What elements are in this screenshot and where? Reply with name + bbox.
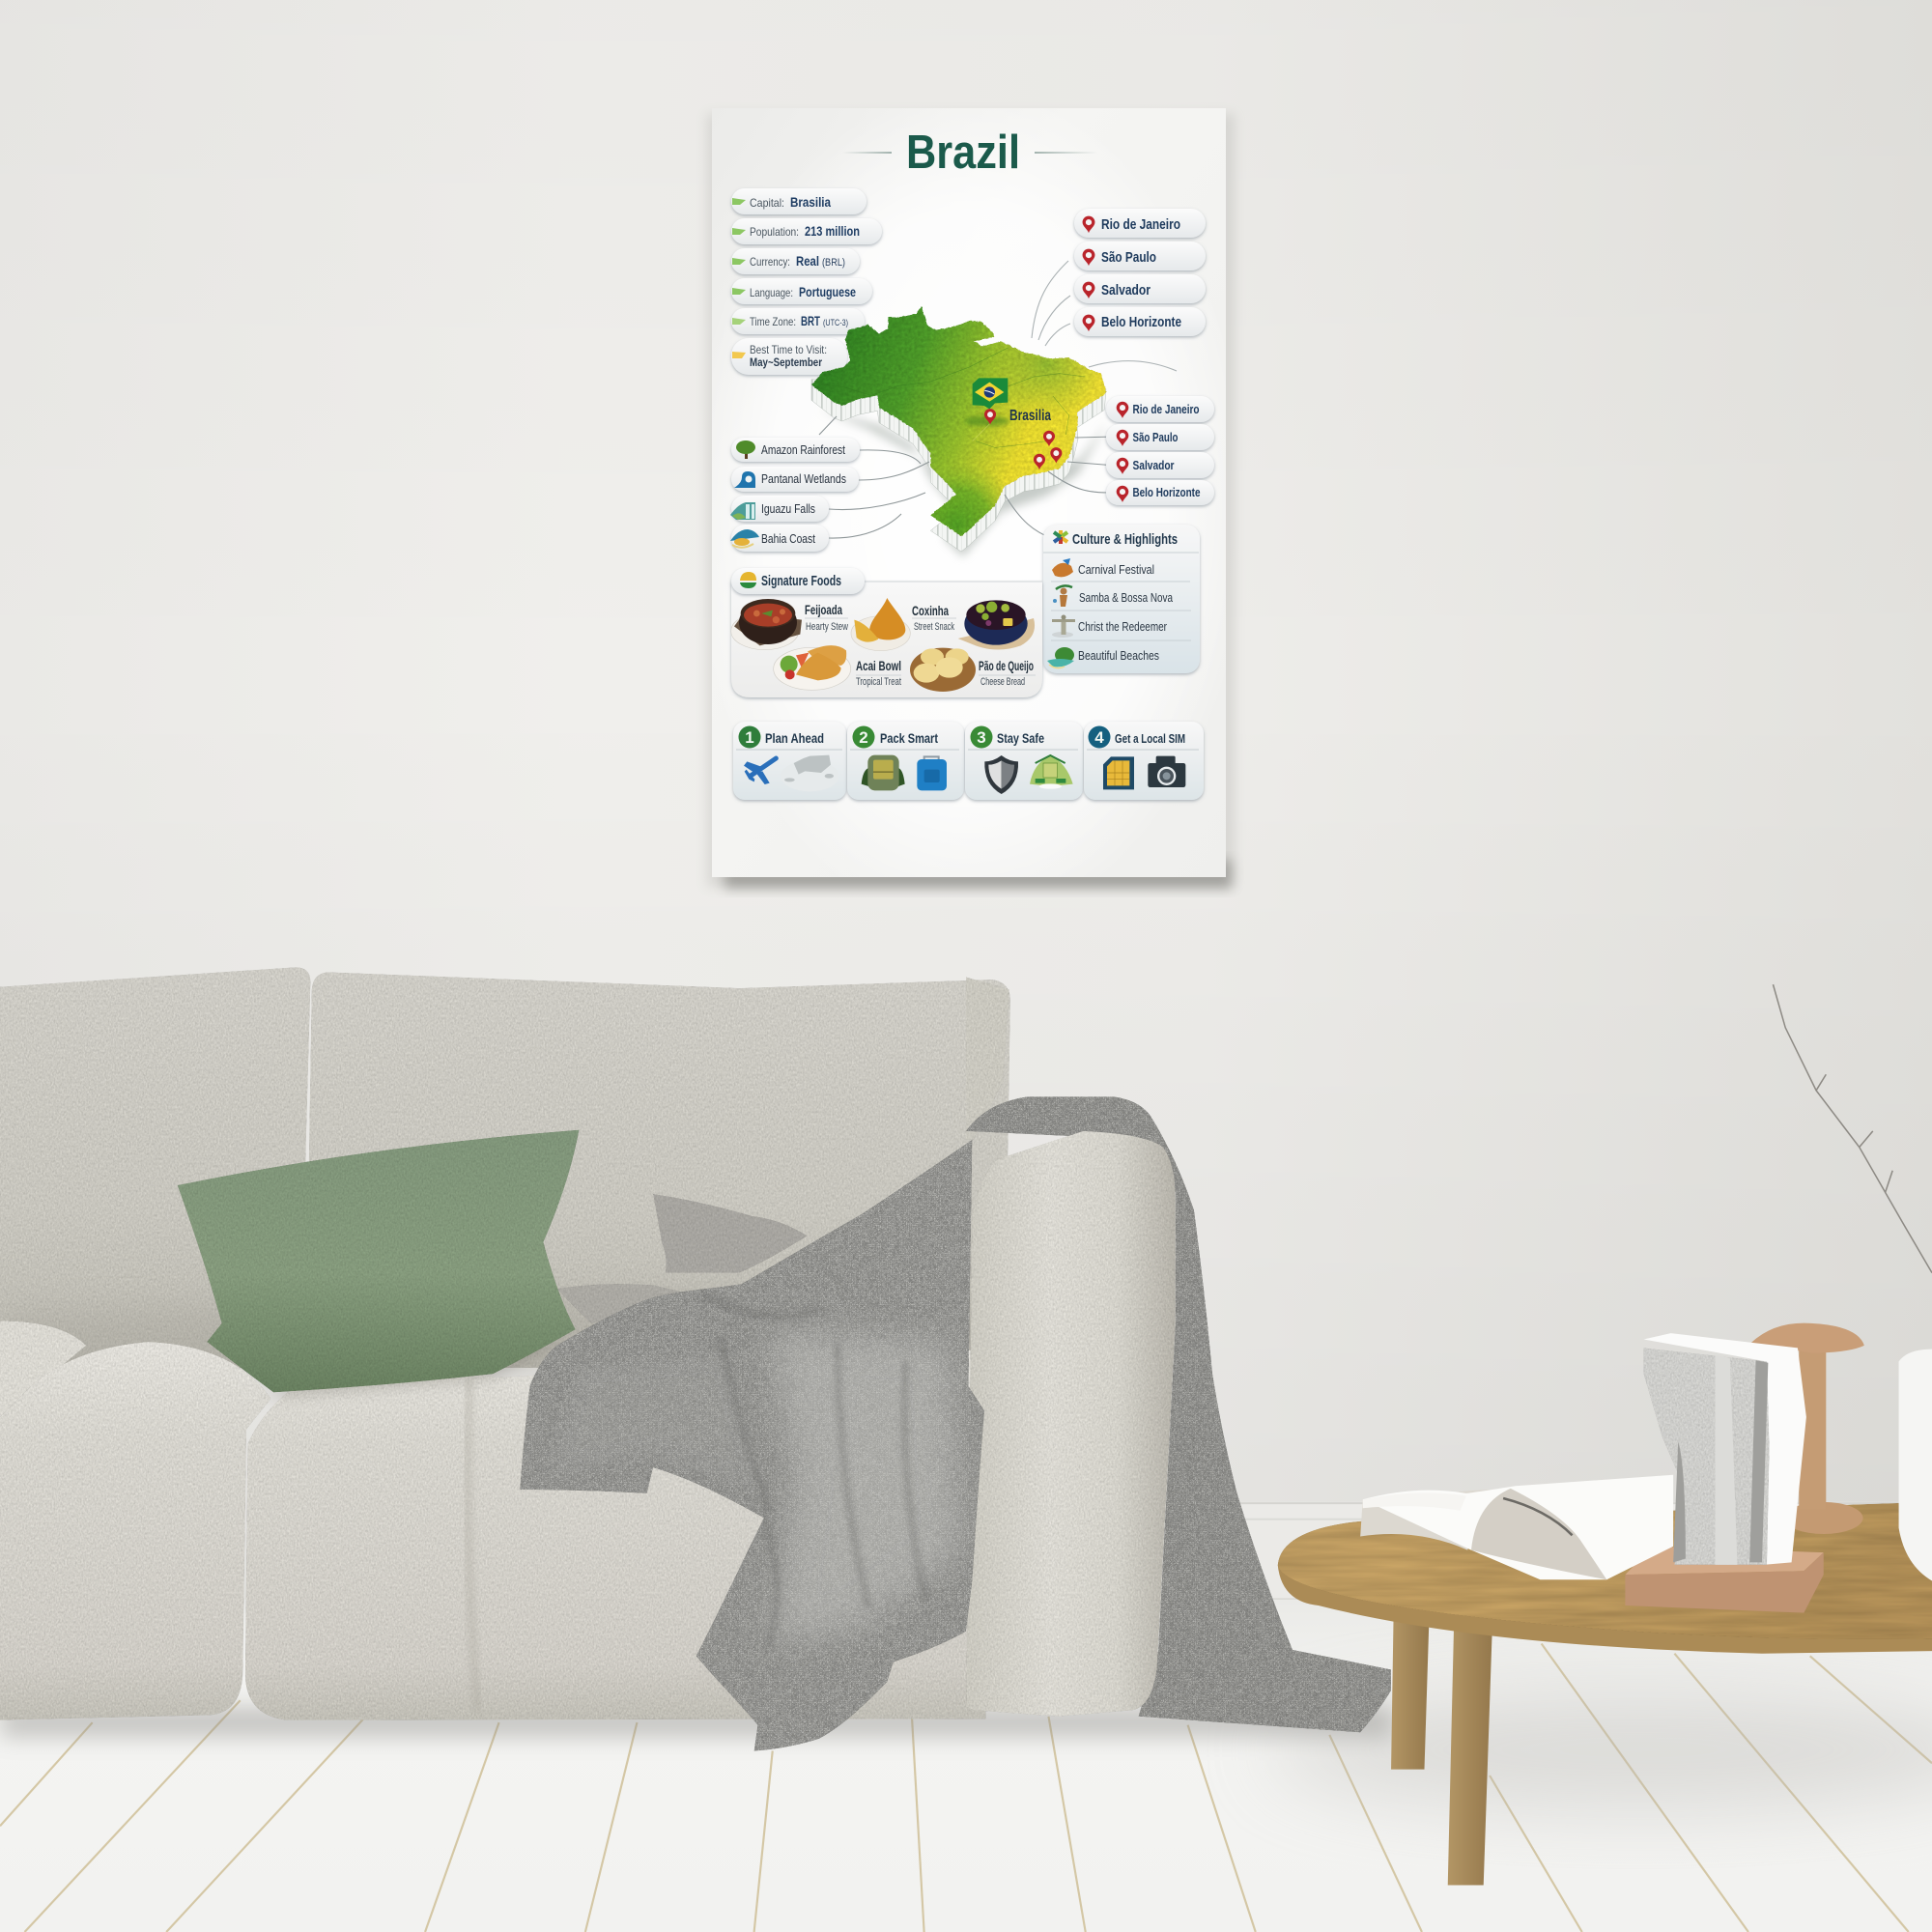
- food: feijoada pot: [731, 599, 802, 650]
- icon: SIM card: [1103, 756, 1134, 789]
- floor with planks: [0, 1600, 1932, 1932]
- icon: airplane: [744, 758, 776, 784]
- fact: time zone: BRT: [801, 313, 820, 328]
- panel: facts: [731, 188, 882, 375]
- pillow grey small: [557, 1194, 807, 1323]
- city: Sao Paulo: São Paulo: [1132, 430, 1179, 444]
- icon: camera: [1148, 756, 1185, 787]
- foods heading tab: Signature Foods: [761, 573, 841, 589]
- sofa seat rear left: [0, 1321, 86, 1417]
- icon: green building: [1030, 755, 1073, 789]
- panel: top cities: [1074, 209, 1206, 336]
- table legs: [1391, 1614, 1492, 1886]
- fact: population: [731, 218, 882, 244]
- food: Pao de Queijo label: [979, 658, 1034, 688]
- sofa back cushion left: [0, 967, 310, 1368]
- culture: Carnival Festival: Carnival Festival: [1078, 562, 1154, 577]
- icon: faded world map: [781, 755, 838, 791]
- nature: Bahia Coast: Bahia Coast: [761, 531, 815, 546]
- blanket front: [520, 1140, 984, 1750]
- fact: population: 213 million: [805, 223, 860, 239]
- fact: currency: Currency:: [750, 255, 790, 269]
- food: coxinha: [851, 598, 910, 651]
- tip 2: Pack Smart: [847, 722, 964, 800]
- coffee table: [1278, 1502, 1932, 1886]
- food: wrap: [774, 645, 851, 690]
- fact: best time to visit: May~September: [750, 355, 822, 369]
- tip 2: Pack Smart: Pack Smart: [880, 730, 938, 746]
- food: Coxinha label: [912, 603, 954, 633]
- fact: capital: [731, 188, 867, 214]
- city pins on map: [1034, 431, 1062, 469]
- sofa seat crease: [468, 1380, 478, 1713]
- food: Pao de Queijo label: Pão de Queijo: [979, 658, 1034, 673]
- food: acai bowl: [958, 600, 1035, 649]
- culture: Beautiful Beaches: [1047, 647, 1159, 668]
- culture: Christ the Redeemer: Christ the Redeemer: [1078, 619, 1168, 634]
- tip 3: Stay Safe: 3: [977, 728, 986, 747]
- map extruded side: [811, 380, 1106, 552]
- map of Brazil: [811, 306, 1108, 557]
- connector lines: top cities: [1032, 261, 1177, 371]
- baseboard: [1182, 1502, 1932, 1603]
- sofa seat left: [0, 1342, 271, 1720]
- fact: time zone: (UTC-3): [823, 318, 848, 327]
- tip 1: Plan Ahead: [733, 722, 846, 800]
- food: Coxinha label: Coxinha: [912, 603, 949, 618]
- white vase: [1899, 1350, 1932, 1580]
- fact: best time to visit: [731, 338, 847, 375]
- tip 4: Get a Local SIM: Get a Local SIM: [1115, 731, 1185, 746]
- food: pao de queijo: [910, 648, 976, 692]
- poster: [712, 108, 1226, 877]
- sofa: [0, 967, 1010, 1720]
- pin connector: [973, 423, 990, 441]
- icon: culture pinwheel: [1054, 530, 1067, 544]
- panel: lower cities: [1106, 396, 1214, 505]
- fact: currency: Real: [796, 253, 819, 269]
- blanket draped behind arm: [966, 1096, 1391, 1732]
- map rivers: [818, 348, 1085, 447]
- tip 4: Get a Local SIM: [1084, 722, 1204, 800]
- culture heading: Culture & Highlights: [1072, 531, 1178, 548]
- food: Feijoada label: Feijoada: [805, 602, 842, 617]
- icon: shield: [984, 755, 1018, 794]
- sculpture: [1625, 1333, 1824, 1613]
- city: Salvador: Salvador: [1101, 282, 1151, 298]
- table top rim: [1278, 1528, 1932, 1654]
- food: Feijoada label: Hearty Stew: [806, 621, 848, 633]
- Brasilia pin: [984, 409, 996, 425]
- nature: Iguazu Falls: Iguazu Falls: [761, 501, 815, 516]
- food images: [731, 598, 1035, 692]
- Brasilia flag: [973, 378, 1008, 409]
- title: Brazil: [906, 127, 1020, 179]
- culture: Samba and Bossa Nova: Samba & Bossa Nova: [1079, 590, 1174, 605]
- city: Salvador: Salvador: [1132, 458, 1175, 472]
- city: Sao Paulo: São Paulo: [1101, 249, 1156, 266]
- map top surface: [811, 306, 1106, 536]
- icon: blue bag: [917, 756, 947, 790]
- poster shadow: [707, 114, 1235, 889]
- city: Rio de Janeiro: Rio de Janeiro: [1132, 402, 1200, 416]
- branch: [1773, 984, 1932, 1273]
- culture: Carnival Festival: [1052, 558, 1154, 577]
- tip 4: Get a Local SIM: 4: [1094, 728, 1104, 747]
- culture: Samba and Bossa Nova: [1053, 585, 1174, 607]
- food: Pao de Queijo label: Cheese Bread: [980, 676, 1025, 688]
- city: Belo Horizonte: Belo Horizonte: [1101, 314, 1181, 330]
- food: Coxinha label: Street Snack: [914, 621, 954, 633]
- fact: language: Portuguese: [799, 284, 856, 299]
- food: Feijoada label: [805, 602, 848, 633]
- culture: Beautiful Beaches: Beautiful Beaches: [1078, 648, 1159, 663]
- map shadow: [818, 409, 1108, 557]
- connector lines: map: [819, 409, 1116, 539]
- foods heading tab: [731, 568, 865, 594]
- icon: backpack: [862, 755, 905, 790]
- fact: currency: [731, 248, 860, 274]
- fact: time zone: Time Zone:: [750, 315, 796, 328]
- Brasilia label: Brasilia: [1009, 408, 1051, 424]
- sofa seat middle: [245, 1350, 985, 1720]
- open book: [1360, 1475, 1673, 1579]
- fact: population: Population:: [750, 225, 799, 239]
- fact: capital: Capital:: [750, 196, 784, 210]
- back of arm cushion: [966, 977, 1009, 1140]
- city: Rio de Janeiro: Rio de Janeiro: [1101, 216, 1180, 233]
- wooden spool: [1750, 1323, 1864, 1534]
- tip 1: Plan Ahead: 1: [745, 728, 754, 747]
- food: Acai Bowl label: [856, 658, 901, 688]
- sofa back cushion right: [305, 972, 1010, 1368]
- panel: travel tips: [733, 722, 1204, 800]
- fact: best time to visit: Best Time to Visit:: [750, 343, 827, 356]
- tip 3: Stay Safe: [965, 722, 1083, 800]
- sofa arm: [966, 1131, 1176, 1717]
- culture: Christ the Redeemer: [1052, 614, 1168, 638]
- fact: language: Language:: [750, 286, 793, 299]
- nature: Amazon Rainforest: Amazon Rainforest: [761, 442, 845, 457]
- fact: currency: (BRL): [822, 257, 845, 269]
- table top: [1278, 1502, 1932, 1639]
- panel: signature foods: [731, 568, 1042, 697]
- fact: time zone: [731, 308, 865, 334]
- fact: capital: Brasilia: [790, 194, 831, 210]
- panel: culture and highlights: [1043, 525, 1200, 673]
- food: Acai Bowl label: Tropical Treat: [856, 676, 901, 688]
- city: Belo Horizonte: Belo Horizonte: [1132, 485, 1200, 499]
- food: Acai Bowl label: Acai Bowl: [856, 658, 901, 673]
- sofa cushion shade: [0, 1293, 985, 1380]
- tip 2: Pack Smart: 2: [859, 728, 868, 747]
- tip 1: Plan Ahead: Plan Ahead: [765, 730, 824, 746]
- nature: Pantanal Wetlands: Pantanal Wetlands: [761, 471, 846, 486]
- tip 3: Stay Safe: Stay Safe: [997, 730, 1044, 746]
- panel: nature: [730, 438, 860, 552]
- fact: language: [731, 278, 872, 304]
- pillow green: [178, 1130, 579, 1397]
